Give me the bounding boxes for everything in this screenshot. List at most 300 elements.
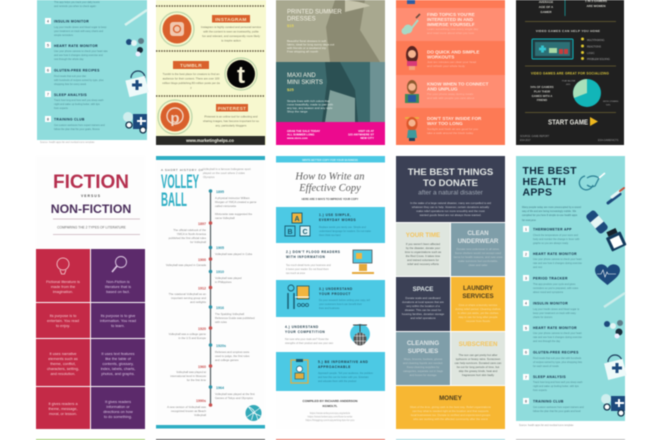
title: Effective Copy bbox=[298, 183, 361, 194]
text: tumblr bbox=[162, 72, 220, 90]
heading: skirts: MINI SKIRTS bbox=[287, 80, 323, 86]
list of health apps: from experts bbox=[54, 107, 69, 110]
non-fiction text: photos, and graphs. bbox=[101, 372, 135, 376]
panel: fiction vs non-fiction bbox=[36, 156, 145, 440]
non-fiction text: It uses text features bbox=[101, 352, 135, 356]
text: dresses: Beautiful floral dresses in soft bbox=[287, 39, 326, 43]
stat text bbox=[530, 85, 554, 102]
app list: 8 bbox=[525, 400, 527, 404]
left events: for the first time bbox=[187, 378, 206, 382]
price: $15 bbox=[287, 23, 294, 28]
app list: rate and see how it changes during exercise bbox=[533, 262, 583, 265]
app list: Get custom workouts from expert trainers and bbox=[533, 406, 584, 409]
right events: Mintonette was suggested the bbox=[215, 212, 253, 216]
heading: dresses: DRESSES bbox=[287, 16, 316, 22]
tile text: local businesses too. Donate to verified and experienced groups bbox=[411, 413, 491, 417]
header: make relief operations run more smoothly and the most bbox=[416, 209, 485, 213]
icon: syringe light bbox=[604, 293, 625, 307]
headings: EVERYDAY WORDS bbox=[319, 218, 356, 222]
heading: skirts bbox=[287, 73, 323, 86]
app list: for each week of meals bbox=[533, 365, 559, 368]
tile text: time to organizations such as bbox=[405, 250, 442, 254]
right events: Reference Guide was published bbox=[215, 316, 255, 320]
tile text: Keep cleaning supplies by bbox=[407, 365, 440, 369]
app list: 7 bbox=[525, 376, 527, 380]
tile text: The sun can get pretty hot after bbox=[459, 353, 497, 357]
pie labels: PLAY ALONE bbox=[562, 80, 576, 82]
tile text: Mops, brooms, buckets, gloves bbox=[404, 357, 443, 361]
panel: effective copy bbox=[276, 156, 385, 440]
left events bbox=[166, 222, 207, 417]
left events: recognized known as Beach bbox=[171, 409, 206, 413]
tile text: during relief period. Cleaning clothes bbox=[455, 307, 501, 311]
subtitle bbox=[53, 219, 140, 234]
app list: from experts bbox=[533, 389, 548, 392]
tile text: disaster. This can be used for bbox=[405, 308, 441, 312]
list of health apps: 6 bbox=[47, 68, 49, 72]
panel: best health apps bbox=[516, 156, 627, 440]
credit line: Source: health apps list and medical icons template bbox=[519, 424, 574, 427]
body text: and read more about what you love bbox=[427, 31, 474, 35]
headings: DO QUICK AND SIMPLE bbox=[427, 50, 479, 54]
right events: 1910 bbox=[216, 270, 224, 274]
body text: Do your research before writing your copy, tell bbox=[319, 299, 370, 302]
header: THE BEST THINGS bbox=[408, 167, 493, 178]
icon: magnifying glass bbox=[112, 256, 126, 272]
heading: socializing: VIDEO GAMES ARE GREAT FOR SOCIALIZING bbox=[531, 72, 609, 76]
credits: https://www.bettercopy.com/how-to-write bbox=[308, 416, 353, 418]
app list: follow the plan that fits your goals and level bbox=[533, 410, 581, 413]
fiction text: Its purpose is to bbox=[50, 314, 76, 318]
tile headings: SUBSCREEN bbox=[459, 341, 498, 348]
text: dresses bbox=[287, 39, 334, 54]
text: tumblr: Tumblr is the best place for creators to find an bbox=[163, 72, 220, 76]
list of health apps: with hundreds of recipes sorted by type, plus bbox=[54, 79, 104, 82]
tile headings: SERVICES bbox=[462, 293, 494, 300]
icon: id card bbox=[291, 359, 308, 383]
left events: A new version of Volleyball was bbox=[167, 405, 207, 409]
body text: and refresh your whole body bbox=[427, 64, 465, 68]
text: dresses: Free shipping all month bbox=[287, 50, 319, 54]
list of health apps: your treatment on track with easy charts and bbox=[54, 30, 104, 33]
panel: social media bbox=[156, 0, 266, 145]
icon: alphabet blocks bbox=[285, 213, 310, 236]
body text: Replace words you rarely use. Simple and bbox=[319, 226, 366, 229]
headings: APPROACHABLE bbox=[318, 365, 351, 369]
body text: Put your phone away during meals bbox=[427, 92, 474, 96]
app list: TRAINING CLUB bbox=[533, 400, 564, 404]
text: instagram: to inspire action bbox=[221, 38, 241, 42]
title bbox=[161, 168, 204, 211]
panel: volleyball timeline bbox=[156, 156, 265, 440]
non-fiction text: to do something. bbox=[104, 415, 132, 419]
icon: character fragment bbox=[407, 0, 415, 4]
app list: Use your phone camera to check your heart bbox=[533, 332, 582, 335]
list of skills: PROBLEM SOLVING bbox=[587, 58, 610, 61]
app list: Use your phone camera to check your heart bbox=[533, 258, 582, 261]
title: APPS bbox=[522, 186, 552, 198]
icon: pinterest: p bbox=[170, 110, 180, 127]
text: tumblr: million blogs publishing 80 million posts per da bbox=[162, 81, 220, 85]
credits: COMPILED BY RICHARD ANDERSON bbox=[302, 399, 358, 403]
list of health apps: 5 bbox=[47, 44, 49, 48]
panel: hobby tips bbox=[396, 0, 505, 145]
label: pinterest: PINTEREST bbox=[218, 106, 246, 111]
icon: tumblr: t bbox=[237, 62, 245, 89]
panel: fashion sale bbox=[276, 0, 385, 145]
stats: ARE WOMEN bbox=[586, 4, 606, 8]
list of health apps: Log your insulin doses and blood sugar to keep bbox=[54, 26, 107, 29]
right events: called mintonette bbox=[215, 204, 237, 208]
body text: strengths of their product and use your own bbox=[285, 342, 334, 345]
heading: skirts: MAXI AND bbox=[287, 73, 316, 79]
list of health apps: TRAINING CLUB bbox=[54, 118, 85, 122]
tile headings bbox=[406, 230, 499, 402]
list of skills: MULTITASKING bbox=[587, 39, 604, 42]
body text bbox=[285, 226, 373, 383]
right events: 1920s bbox=[216, 344, 226, 348]
non-fiction text: information. You read bbox=[100, 319, 136, 323]
body text: understand language for readers. Do not make bbox=[319, 230, 371, 233]
app list: body and monitor the change in fever with bbox=[533, 238, 580, 241]
intro bbox=[203, 167, 251, 179]
title bbox=[294, 172, 365, 194]
tile headings: SPACE bbox=[413, 286, 433, 293]
icon: volleyball bbox=[246, 405, 262, 421]
price: $25 bbox=[287, 87, 294, 92]
stat text: FRIEND bbox=[537, 98, 547, 102]
tile text: donations at local spaces that are bbox=[402, 300, 444, 304]
icon: alphabet blocks: B bbox=[287, 229, 293, 236]
footer text: SOURCE: GAME REPORT bbox=[520, 135, 550, 138]
credits bbox=[302, 399, 358, 422]
fiction text: Fictional literature is bbox=[46, 280, 80, 284]
icon: alphabet blocks: A bbox=[294, 216, 300, 223]
app list bbox=[523, 226, 584, 413]
app list: and rest through the day bbox=[533, 340, 561, 343]
subtitle: COMPARING THE 2 TYPES OF LITERATURE bbox=[57, 226, 127, 230]
list of skills: LOGIC bbox=[587, 52, 595, 55]
headings: YOUR COMPETITION bbox=[285, 330, 325, 334]
app list: Log your insulin doses and blood sugar to bbox=[533, 308, 580, 311]
body text: lives and business bbox=[319, 307, 340, 310]
tile text: If you weren't been affected bbox=[406, 242, 441, 246]
left events: important serving group and bbox=[171, 296, 206, 300]
list of health apps: SLEEP ANALYSIS bbox=[54, 93, 87, 97]
fiction text: made from the bbox=[51, 285, 75, 289]
icon: instagram bbox=[160, 12, 194, 46]
tile text: by the disaster, donate your bbox=[406, 246, 440, 250]
fiction text: and resolution. bbox=[51, 372, 75, 376]
footer bar: www.marketinghelps.co bbox=[185, 138, 234, 143]
right events: Games of Tokyo and Olympics bbox=[215, 396, 253, 400]
right events: used to judge, the first rules bbox=[215, 354, 250, 358]
right events: 1916 bbox=[216, 306, 224, 310]
app list: GLUTEN-FREE RECIPES bbox=[533, 350, 579, 354]
title: VOLLEY bbox=[161, 172, 199, 193]
headings: WITH INFORMATION bbox=[286, 255, 325, 259]
footer text bbox=[520, 135, 619, 142]
tile text: clean and safer bbox=[468, 263, 488, 267]
icon: medicine bottle bbox=[604, 227, 627, 252]
footer band: 123 ANYWHERE ST bbox=[348, 132, 374, 136]
credits: https://www.writeyourcopy.org/article bbox=[310, 412, 351, 415]
list of health apps: Use your phone camera to check your heart rate bbox=[54, 50, 108, 53]
footer band bbox=[276, 122, 385, 145]
headings: 1.) USE SIMPLE, bbox=[319, 213, 351, 217]
intro: compiled for you here 8 simple to-use health apps bbox=[522, 214, 578, 217]
fiction text: moral, or lesson. bbox=[49, 412, 77, 416]
icon: ambulance bbox=[601, 394, 625, 416]
non-fiction text: based on fact. bbox=[106, 290, 130, 294]
icon: tumblr bbox=[225, 58, 257, 90]
left events: The official rulebook of the bbox=[173, 228, 206, 232]
icon: first aid kit bbox=[604, 355, 627, 380]
fiction text: elements such as bbox=[48, 357, 78, 361]
left events: YMCA in North America bbox=[177, 232, 206, 236]
tile headings: SUPPLIES bbox=[408, 348, 438, 355]
tile text: Donate new underwear in all sizes. bbox=[456, 247, 500, 251]
icon: syringe bbox=[125, 10, 147, 25]
intro: Many people today are more preoccupied by a sound bbox=[522, 206, 582, 209]
left events: 1990s bbox=[196, 399, 206, 403]
header: wanted goods listed are not always those wanted. bbox=[420, 213, 482, 217]
icon: game controller bbox=[532, 39, 573, 59]
non-fiction text: directions on how bbox=[103, 410, 133, 414]
app list: night and wake up feeling better, with tips bbox=[533, 385, 579, 388]
text: tumblr: y bbox=[190, 86, 192, 90]
app list: reminders so you're prepared, with notes bbox=[533, 287, 579, 290]
body text: Too much detail hurts your business and bbox=[286, 264, 331, 267]
tile headings: YOUR TIME bbox=[406, 232, 440, 239]
title: BALL bbox=[161, 190, 187, 211]
list of health apps: Track how long and how well you sleep each bbox=[54, 99, 104, 102]
list of health apps: follow the plan that fits your goals, fitness bbox=[54, 128, 100, 131]
label: instagram: INSTAGRAM bbox=[215, 17, 247, 23]
app list: and rest bbox=[533, 266, 542, 269]
right events: 1905 bbox=[216, 246, 224, 250]
body text: Approach people. Tell your audience, the problem bbox=[318, 372, 373, 375]
left events: Volleyball was a college game bbox=[169, 332, 206, 336]
app list: 2 bbox=[525, 252, 527, 256]
text: skirts: move beautifully, made to pair with bbox=[287, 102, 333, 106]
tile text: recover from floods bbox=[466, 319, 491, 323]
title: How to Write an bbox=[294, 172, 365, 182]
icon: ambulance bbox=[123, 112, 147, 133]
tile text: very within the location of a bbox=[406, 304, 440, 308]
right events: in Philippines bbox=[215, 280, 232, 284]
body text: Not sure who your rivals are? Know the bbox=[285, 338, 329, 341]
panel: things to donate bbox=[396, 156, 505, 440]
footer band: www.store.com bbox=[286, 136, 308, 140]
tile headings: CLEAN bbox=[467, 230, 489, 237]
left events: 1912 bbox=[198, 286, 206, 290]
tile text: the Red Cross. It takes time bbox=[406, 254, 441, 258]
title: VERSUS bbox=[81, 194, 101, 198]
list of health apps: rest through the whole day bbox=[54, 58, 84, 61]
title: THE BEST bbox=[522, 165, 577, 177]
app list: charts for doctors bbox=[533, 316, 553, 319]
list of health apps: 4 bbox=[47, 20, 49, 24]
intro: Olympics bbox=[203, 175, 215, 179]
left events: Volleyball was played at bbox=[176, 370, 206, 374]
tile text: and relief operations bbox=[410, 316, 436, 320]
left events: The rotational Volleyball as an bbox=[169, 292, 206, 296]
tile text: can buy what is needed right at the location and that supports bbox=[412, 409, 489, 413]
header: TO DONATE bbox=[423, 178, 478, 189]
body text: and how this can be better with you. Entertain bbox=[318, 376, 369, 379]
app list: HEART RATE MONITOR bbox=[533, 252, 577, 256]
right events: The Spalding Volleyball bbox=[215, 312, 244, 316]
list of health apps: and reminds you when to check again bbox=[54, 5, 97, 8]
intro bbox=[522, 206, 582, 222]
left events: for Volleyball bbox=[190, 240, 206, 244]
tile text: Some shelters would not accept used bbox=[455, 251, 502, 255]
body text: your customers how it can benefit their bbox=[319, 303, 362, 306]
footer text: ESA-GAMEFACTS bbox=[598, 139, 619, 142]
non-fiction text bbox=[100, 280, 136, 419]
body text: and talk with people you care about bbox=[427, 96, 474, 100]
label: pinterest bbox=[216, 104, 248, 112]
non-fiction text: literature that is bbox=[105, 285, 131, 289]
body text: Just ten minutes can clear your head bbox=[427, 60, 476, 64]
heading: dresses: PRINTED SUMMER bbox=[287, 10, 342, 16]
stats bbox=[539, 0, 607, 14]
intro: Volleyball is a famous Indiegame sport bbox=[203, 167, 251, 171]
header: after a natural disaster bbox=[418, 190, 484, 196]
title bbox=[51, 172, 131, 216]
body text: and educate them with the product bbox=[318, 380, 357, 383]
body text: Sunlight and fresh air are good for you bbox=[427, 127, 478, 131]
left events: 1897 bbox=[198, 222, 206, 226]
left events: 1920 bbox=[198, 327, 206, 331]
fiction text bbox=[46, 280, 80, 416]
headings: AND UNPLUG bbox=[427, 86, 458, 92]
stats: AGE OF A bbox=[539, 5, 554, 9]
body text: it bores your reader. Do not flood them bbox=[286, 268, 329, 271]
fiction text: entertain. You read bbox=[47, 319, 79, 323]
non-fiction text: contents, glossary, bbox=[102, 362, 134, 366]
stats: GAMER bbox=[540, 10, 552, 14]
app list: Check the temperature of your room and bbox=[533, 234, 579, 237]
app list: Track how long and how well you sleep each bbox=[533, 381, 583, 384]
left events: 1900 bbox=[198, 258, 206, 262]
list of health apps: This app helps you track your daily levels bbox=[54, 1, 100, 4]
intro: for everyone bbox=[522, 219, 537, 222]
text: dresses: fabric, ideal for long sunny days out bbox=[287, 42, 334, 46]
app list: INSULIN MONITOR bbox=[533, 302, 568, 306]
title bbox=[522, 165, 577, 198]
fiction text: imagination. bbox=[53, 290, 73, 294]
tile headings: UNDERWEAR bbox=[458, 238, 499, 245]
headings: 2.) DON'T FLOOD READERS bbox=[286, 250, 340, 254]
tile text: and boxes for storage bbox=[409, 373, 437, 377]
top band: WRITE BETTER COPY FOR YOUR BUSINESS bbox=[302, 158, 358, 162]
headings: KNOW WHEN TO CONNECT bbox=[427, 82, 489, 86]
right events: name Volleyball bbox=[215, 216, 235, 220]
tile text bbox=[402, 242, 503, 421]
header: In the wake of a large natural disaster, many are compelled to aid bbox=[410, 201, 491, 205]
icon: syringe bbox=[608, 188, 624, 203]
footer bar bbox=[156, 136, 265, 145]
body text: Learn something new every single day bbox=[427, 27, 479, 31]
right events: A physical instructor William bbox=[215, 196, 250, 200]
app list: Find meals that suit your diet with hundreds bbox=[533, 357, 582, 360]
tile headings: LAUNDRY bbox=[463, 285, 494, 292]
title: A SHORT HISTORY OF bbox=[161, 168, 204, 172]
headings: FIND TOPICS YOU'RE bbox=[427, 12, 475, 17]
fiction text: It gives readers a bbox=[48, 402, 78, 406]
title: HEALTH bbox=[522, 176, 566, 188]
panel: video games bbox=[516, 0, 624, 145]
list of health apps bbox=[45, 1, 108, 131]
tile headings: MONEY bbox=[439, 395, 463, 402]
headings: WAY TOO LONG bbox=[427, 121, 463, 126]
list of skills bbox=[581, 38, 610, 61]
text: pinterest: Pinterest is an online tool for collecting and bbox=[204, 114, 258, 118]
tile text: items for health reasons, and new ones bbox=[454, 255, 503, 259]
body text bbox=[427, 27, 479, 135]
pie labels: 54% bbox=[606, 104, 610, 106]
app list: This app predicts your cycle and gives bbox=[533, 283, 576, 286]
fiction text: to enjoy. bbox=[56, 324, 70, 328]
right events: Volleyball was played in Cuba bbox=[215, 252, 252, 256]
tile text: and trained volunteers for bbox=[407, 258, 439, 262]
icon: bandage bbox=[585, 209, 609, 235]
right events bbox=[215, 190, 257, 400]
icon: woman with hat bbox=[405, 117, 419, 141]
left events: and netlights bbox=[190, 300, 207, 304]
non-fiction text: Non-Fiction is bbox=[106, 280, 130, 284]
credit line: Source: health apps list and medical icons template bbox=[40, 141, 95, 144]
tile text: make survivors feel comfortable, bbox=[458, 259, 498, 263]
icon: light bulb bbox=[57, 258, 69, 274]
non-fiction text: index, labels, charts, bbox=[101, 367, 135, 371]
title: FICTION bbox=[53, 172, 129, 193]
stat text: 54% OF GAMERS bbox=[530, 85, 554, 89]
intro: played on the court where 2 sides bbox=[203, 171, 245, 175]
tile headings: CLEANING bbox=[407, 340, 439, 347]
icon: monitor and boxes bbox=[352, 250, 374, 273]
subtitle: HERE ARE 5 WAYS TO IMPROVE YOUR COPY bbox=[302, 197, 359, 201]
text: skirts: Shop the range bbox=[287, 110, 308, 114]
tile text: and cleaning liquids are needed. bbox=[403, 361, 443, 365]
app list: 5 bbox=[525, 326, 527, 330]
list of health apps: simple reminders bbox=[54, 34, 74, 37]
tile text: who are working with the affected community after the event bbox=[413, 417, 488, 421]
tile text: Give or share a laundry service bbox=[459, 303, 498, 307]
app list: 1 bbox=[525, 228, 527, 232]
label: tumblr bbox=[173, 61, 209, 69]
footer band: NEW CITY bbox=[360, 136, 374, 140]
credits: KGMOLTL bbox=[322, 404, 338, 408]
pie labels: 46% bbox=[566, 84, 570, 86]
tile grid bbox=[396, 223, 505, 429]
tile text: fragrances hurt skin badly bbox=[462, 373, 495, 377]
app list: SLEEP ANALYSIS bbox=[533, 375, 566, 379]
footer band: VISIT US AT bbox=[358, 129, 374, 133]
headings: INTERESTED IN AND bbox=[427, 17, 474, 22]
fiction text: characters, setting, bbox=[47, 367, 79, 371]
app list: of recipes sorted by type, plus shopping lists bbox=[533, 361, 583, 364]
header: whatever they can to help. However, certain donations actually bbox=[412, 205, 490, 209]
list of health apps: 7 bbox=[47, 92, 49, 96]
right events: with rules bbox=[215, 320, 227, 324]
app list: about mood and symptoms bbox=[533, 291, 564, 294]
timeline axis bbox=[210, 191, 212, 406]
tile text: can help survivors. Donated cans can bbox=[455, 361, 502, 365]
tile text: skip the greasy kinds; heat and bbox=[459, 369, 498, 373]
